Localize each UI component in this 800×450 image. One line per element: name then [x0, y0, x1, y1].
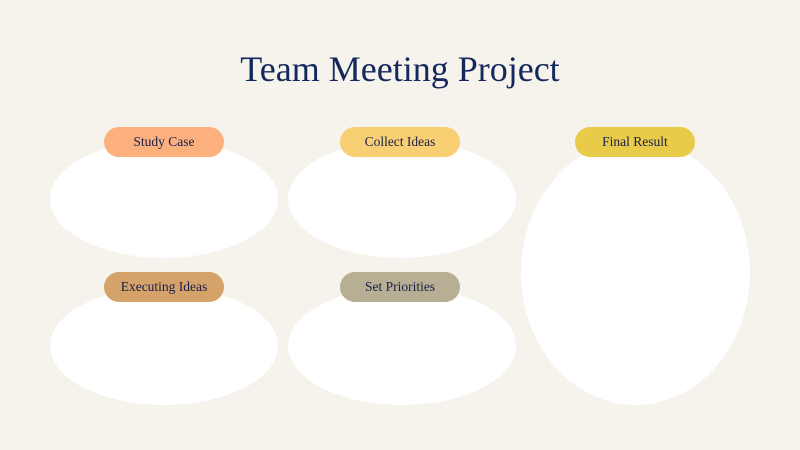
label: study case — [104, 127, 224, 157]
panel: executing ideas — [50, 287, 278, 405]
label: collect ideas: Collect Ideas — [365, 134, 435, 149]
panel: study case — [50, 140, 278, 258]
label: study case: Study Case — [133, 134, 195, 149]
label: final result — [575, 127, 695, 157]
label: set priorities — [340, 272, 460, 302]
label: final result: Final Result — [602, 134, 668, 149]
panel: final result — [521, 140, 750, 405]
label: collect ideas — [340, 127, 460, 157]
label: executing ideas — [104, 272, 224, 302]
panel: collect ideas — [288, 140, 516, 258]
title: Team Meeting Project — [240, 49, 560, 89]
label: executing ideas: Executing Ideas — [121, 279, 207, 294]
panel: set priorities — [288, 287, 516, 405]
label: set priorities: Set Priorities — [365, 279, 435, 294]
